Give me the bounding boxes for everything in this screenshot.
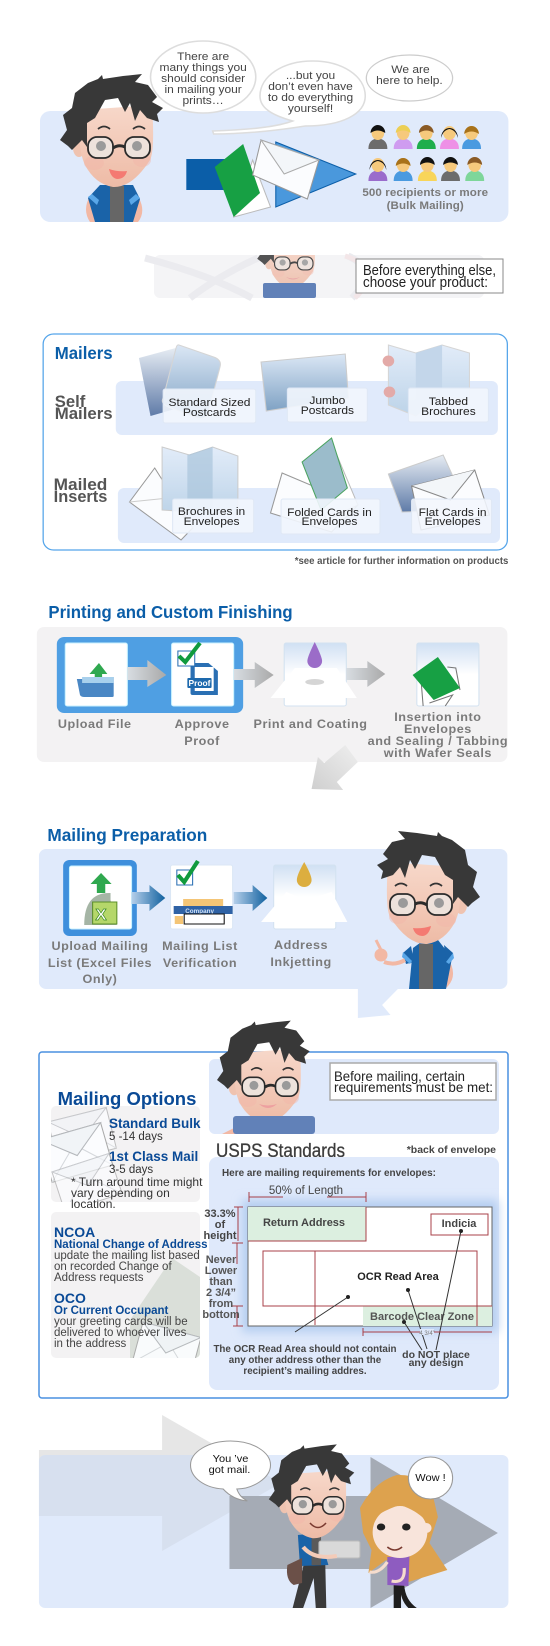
step: mailing list verification: Company xyxy=(185,908,215,915)
character: boy body with mail xyxy=(287,1533,360,1608)
label: mailing list verification: Mailing List xyxy=(162,939,238,953)
dimension: height: bottom xyxy=(202,1309,240,1321)
product: flat cards in envelopes: Envelopes xyxy=(425,515,481,528)
panel: usps xyxy=(209,1157,499,1390)
product: standard postcards xyxy=(139,345,256,423)
arrow: verify to inkjet xyxy=(234,885,267,911)
panel: mailing options top xyxy=(51,1106,200,1202)
dimension: 50% of length: 50% of Length xyxy=(269,1185,343,1197)
text: oco: delivered to whoever lives xyxy=(54,1327,187,1339)
section: mailing preparation xyxy=(39,824,507,1018)
label: insertion: Envelopes xyxy=(404,722,472,736)
diagram: envelope zones: Barcode Clear Zone xyxy=(370,1311,474,1323)
note: back of envelope: *back of envelope xyxy=(407,1144,496,1156)
section: mailers xyxy=(43,334,509,567)
text: recipients: 500 recipients or more xyxy=(362,187,488,199)
text: ocr note: The OCR Read Area should not contain xyxy=(213,1344,397,1355)
speech bubble: got mail xyxy=(191,1441,271,1501)
callout: before everything else: choose your product: xyxy=(363,275,488,291)
speech bubble: here to help: We are xyxy=(391,63,430,76)
text: oco: in the address xyxy=(54,1338,126,1350)
row label: mailed inserts xyxy=(54,474,107,506)
text: ncoa: NCOA xyxy=(54,1224,95,1240)
text: ocr note: recipient’s mailing addres. xyxy=(243,1366,367,1377)
dimension: height: height xyxy=(204,1230,237,1242)
arrow: blue xyxy=(186,142,356,207)
speech bubble: do everything yourself xyxy=(213,61,365,134)
speech bubble: do everything yourself: ...but you xyxy=(286,69,335,82)
band: self mailers xyxy=(116,381,498,435)
dimension: height: from xyxy=(209,1298,233,1310)
text: first class xyxy=(109,1149,198,1176)
product: jumbo postcards: Jumbo xyxy=(309,394,346,407)
dimension: height: Never xyxy=(206,1254,237,1266)
step: insertion xyxy=(413,643,479,706)
diagram: envelope zones: Indicia xyxy=(442,1218,477,1230)
row label: self mailers: Self xyxy=(55,391,85,411)
callout: before mailing xyxy=(330,1063,496,1100)
label: address inkjetting: Address xyxy=(274,938,328,952)
speech bubble: wow: Wow ! xyxy=(415,1472,446,1484)
step: upload file xyxy=(65,643,127,706)
step: upload mailing list: X xyxy=(95,906,107,924)
label: insertion: and Sealing / Tabbing xyxy=(368,734,508,748)
dimension: barcode width: 4 3/4” xyxy=(419,1331,435,1337)
step: approve proof: Proof xyxy=(188,679,211,688)
panel: intro background xyxy=(40,111,508,222)
product: flat cards in envelopes xyxy=(388,455,492,534)
arrow: faint large xyxy=(39,1415,281,1551)
label: upload mailing list: Only) xyxy=(83,972,117,986)
heading: mailing options: Mailing Options xyxy=(58,1088,196,1109)
step: approve proof xyxy=(172,643,234,706)
label: upload mailing list: List (Excel Files xyxy=(48,956,152,970)
panel: ncoa oco xyxy=(51,1212,200,1358)
product: standard postcards: Standard Sized xyxy=(168,396,250,409)
character: boy pointing xyxy=(374,831,480,989)
product: jumbo postcards xyxy=(261,354,367,422)
arrow: upload to verify xyxy=(132,885,165,911)
speech bubble: here to help: here to help. xyxy=(376,74,443,87)
note: turnaround: location. xyxy=(71,1197,116,1211)
heading: printing: Printing and Custom Finishing xyxy=(48,601,293,622)
callout: before mailing: requirements must be met: xyxy=(334,1079,493,1095)
panel: printing xyxy=(37,627,507,762)
text: ncoa: National Change of Address xyxy=(54,1239,208,1251)
text: ncoa: update the mailing list based xyxy=(54,1250,200,1262)
text: ncoa xyxy=(54,1224,208,1284)
section: closing xyxy=(39,1415,508,1608)
panel: requirements xyxy=(39,1052,508,1398)
label: upload file: Upload File xyxy=(58,717,132,731)
product: flat cards in envelopes: Flat Cards in xyxy=(419,506,487,519)
product: brochures in envelopes: Brochures in xyxy=(178,505,245,518)
icons: recipients xyxy=(368,125,484,181)
section: intro content xyxy=(151,41,488,217)
section: choose product xyxy=(144,253,504,301)
arrow: approve to print xyxy=(234,662,274,688)
speech bubble: many things: There are xyxy=(177,50,229,63)
speech bubble: got mail: got mail. xyxy=(209,1464,250,1476)
text: ncoa: Address requests xyxy=(54,1272,144,1284)
text: standard bulk: Standard Bulk xyxy=(109,1116,201,1131)
label: approve proof: Proof xyxy=(184,734,220,748)
row label: mailed inserts: Inserts xyxy=(54,486,107,506)
note: turnaround: * Turn around time might xyxy=(71,1175,203,1189)
speech bubble: wow xyxy=(408,1457,453,1499)
text: oco: Or Current Occupant xyxy=(54,1305,169,1317)
character: girl xyxy=(360,1475,447,1608)
callout: before everything else xyxy=(356,259,503,293)
speech bubble: many things xyxy=(151,41,256,113)
dimension: height: Lower xyxy=(205,1265,238,1277)
label: approve proof: Approve xyxy=(175,717,230,731)
speech bubble: many things: prints… xyxy=(183,94,224,107)
dimension: 50% of length xyxy=(249,1185,366,1202)
text: recipients: (Bulk Mailing) xyxy=(387,200,464,212)
dimension: barcode width xyxy=(363,1328,492,1337)
panel: mailers xyxy=(43,334,507,550)
product: tabbed brochures xyxy=(383,345,488,422)
text: ocr note: any other address other than the xyxy=(229,1355,382,1366)
speech bubble: do everything yourself: yourself! xyxy=(288,102,333,115)
dimension: height: of xyxy=(215,1219,226,1231)
product: standard postcards: Postcards xyxy=(183,406,236,419)
heading: mailing preparation: Mailing Preparation xyxy=(47,824,207,845)
speech bubble: many things: many things you xyxy=(160,61,247,74)
step: upload mailing list xyxy=(63,860,137,936)
product: jumbo postcards: Postcards xyxy=(301,404,354,417)
arrow: light blue down xyxy=(358,989,398,1018)
text: do not place: any design xyxy=(409,1357,463,1369)
character: boy head xyxy=(269,1444,354,1538)
product: brochures in envelopes: Envelopes xyxy=(184,515,240,528)
label: mailing list verification: Verification xyxy=(163,956,237,970)
speech bubble: do everything yourself: don’t even have xyxy=(268,80,353,93)
text: oco: your greeting cards will be xyxy=(54,1316,188,1328)
row label: self mailers xyxy=(55,391,113,423)
text: oco xyxy=(54,1290,188,1350)
text: requirements intro: Here are mailing requirements for envelopes: xyxy=(222,1167,436,1179)
character: boy waving xyxy=(60,74,163,222)
note: turnaround: vary depending on xyxy=(71,1186,170,1200)
speech bubble: many things: in mailing your xyxy=(165,83,242,96)
section: printing xyxy=(37,601,508,790)
text: oco: OCO xyxy=(54,1290,86,1306)
text: first class: 3-5 days xyxy=(109,1164,153,1176)
speech bubble: got mail: You ’ve xyxy=(213,1453,248,1465)
product: tabbed brochures: Brochures xyxy=(421,405,476,418)
dimension: height xyxy=(202,1207,243,1326)
product: folded cards in envelopes: Envelopes xyxy=(301,515,358,528)
highlight: upload and approve xyxy=(57,637,243,713)
diagram: envelope zones xyxy=(242,1200,498,1350)
step: address inkjetting xyxy=(261,862,347,929)
panel: choose product banner xyxy=(144,253,484,301)
row label: self mailers: Mailers xyxy=(55,403,113,423)
heading: usps standards: USPS Standards xyxy=(216,1141,345,1162)
label: insertion: Insertion into xyxy=(394,710,481,724)
label: insertion: with Wafer Seals xyxy=(383,746,492,760)
step: mailing list verification xyxy=(171,861,233,929)
callout: before everything else: Before everything else, xyxy=(363,263,496,279)
footnote: *see article for further information on products xyxy=(295,556,509,567)
dimension: height: 2 3/4” xyxy=(206,1287,236,1299)
text: first class: 1st Class Mail xyxy=(109,1149,198,1164)
panel: boy banner xyxy=(209,1059,499,1134)
text: standard bulk xyxy=(109,1116,201,1143)
character: boy with laptop xyxy=(217,1021,315,1134)
product: brochures in envelopes xyxy=(129,447,254,540)
dimension: height: 33.3% xyxy=(204,1208,236,1220)
row label: mailed inserts: Mailed xyxy=(54,474,107,494)
dimension: height: than xyxy=(209,1276,233,1288)
speech bubble: many things: should consider xyxy=(161,72,245,85)
text: standard bulk: 5 -14 days xyxy=(109,1131,163,1143)
text: do not place: do NOT place xyxy=(402,1349,470,1361)
icon: envelope and green mailer xyxy=(215,140,319,217)
product: folded cards in envelopes: Folded Cards in xyxy=(287,506,372,519)
text: ncoa: on recorded Change of xyxy=(54,1261,172,1273)
arrow: upload to approve xyxy=(127,660,166,687)
diagram: envelope zones: Return Address xyxy=(263,1217,345,1229)
product: tabbed brochures: Tabbed xyxy=(429,395,468,408)
arrow: print to insertion xyxy=(346,661,385,687)
label: address inkjetting: Inkjetting xyxy=(270,955,332,969)
product: folded cards in envelopes xyxy=(271,438,380,534)
arrow: grey large xyxy=(229,1457,498,1608)
arrow: diagonal grey xyxy=(312,745,358,790)
label: print and coating: Print and Coating xyxy=(254,717,368,731)
panel: closing xyxy=(39,1455,508,1608)
arrow: faint overlay xyxy=(39,1455,274,1550)
label: upload mailing list: Upload Mailing xyxy=(51,939,149,953)
heading: mailers: Mailers xyxy=(55,342,113,363)
speech bubble: here to help xyxy=(366,55,453,101)
band: mailed inserts xyxy=(118,488,500,543)
panel: mailing preparation xyxy=(39,849,507,989)
diagram: envelope zones: OCR Read Area xyxy=(357,1271,440,1283)
callout: before mailing: Before mailing, certain xyxy=(334,1068,465,1084)
speech bubble: do everything yourself: to do everything xyxy=(268,91,353,104)
step: print and coating xyxy=(271,642,357,706)
